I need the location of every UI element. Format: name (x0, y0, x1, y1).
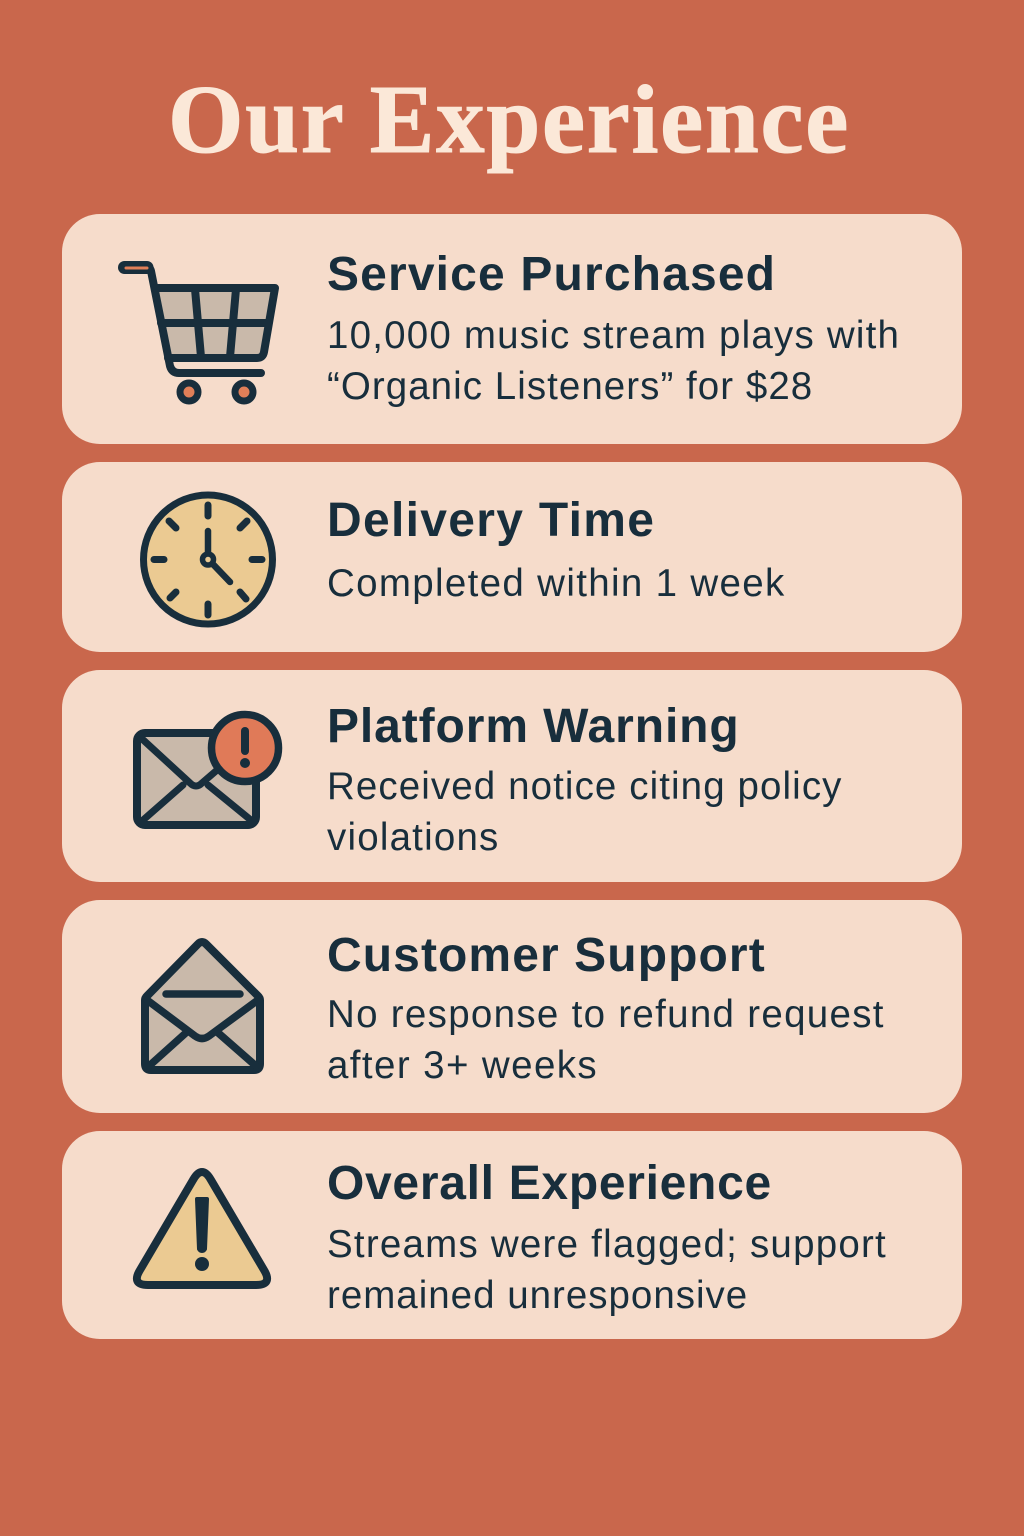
panel: customer support (62, 900, 962, 1113)
text: customer support (327, 993, 885, 1086)
title: Our Experience (168, 66, 850, 173)
text: service purchased: 10,000 music stream plays with (327, 314, 900, 357)
text: overall experience: Streams were flagged; support (327, 1223, 887, 1266)
text: platform warning (327, 765, 843, 858)
text: delivery time: Completed within 1 week (327, 562, 786, 605)
icon: warning triangle (137, 1172, 267, 1285)
text: service purchased (327, 314, 900, 408)
icon: shopping cart (124, 268, 275, 401)
heading: service purchased: Service Purchased (327, 248, 776, 301)
panel: overall experience (62, 1131, 962, 1339)
text: platform warning: Received notice citing policy (327, 765, 843, 808)
text: service purchased: “Organic Listeners” for $28 (327, 364, 813, 408)
text: overall experience: remained unresponsive (327, 1274, 748, 1316)
heading: overall experience: Overall Experience (327, 1157, 772, 1210)
panel: platform warning (62, 670, 962, 882)
text: platform warning: violations (327, 816, 500, 858)
text: overall experience (327, 1223, 887, 1316)
panel: delivery time (62, 462, 962, 652)
text: customer support: No response to refund request (327, 993, 885, 1036)
panel: service purchased (62, 214, 962, 444)
icon: clock (144, 495, 272, 624)
text: customer support: after 3+ weeks (327, 1044, 598, 1086)
icon: open envelope (145, 942, 260, 1070)
heading: delivery time: Delivery Time (327, 494, 655, 547)
heading: platform warning: Platform Warning (327, 700, 740, 753)
icon: envelope with alert (137, 714, 278, 825)
heading: customer support: Customer Support (327, 929, 766, 982)
